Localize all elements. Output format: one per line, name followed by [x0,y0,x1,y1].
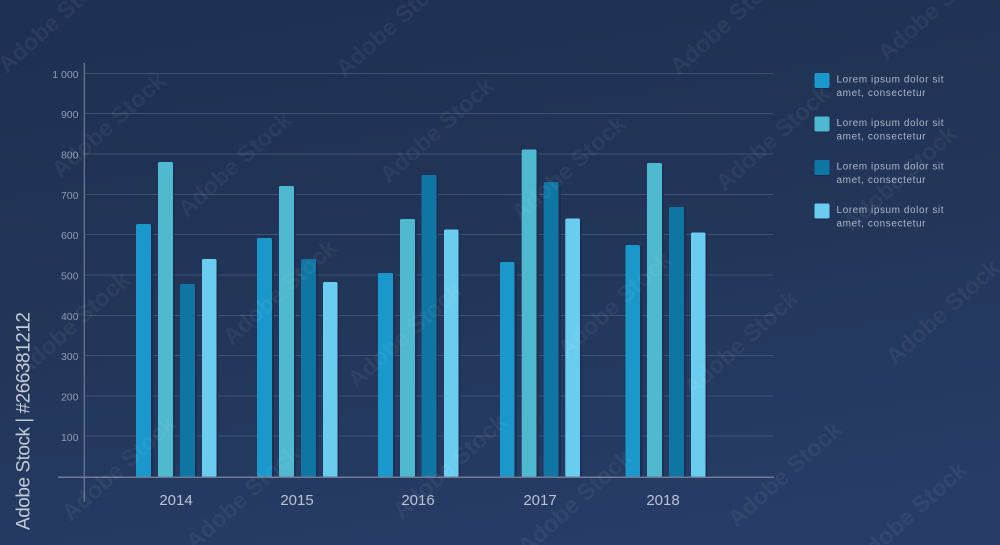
y-axis labels [52,69,79,444]
y-axis labels: 700 [61,190,79,202]
chart [52,63,774,509]
x-axis year labels: 2015 [280,492,314,509]
watermarks: Adobe Stock [218,234,342,350]
x-axis year labels: 2017 [523,492,557,509]
watermarks: Adobe Stock [679,285,803,401]
y-axis labels: 200 [61,392,79,404]
legend item 2 [814,116,944,142]
legend item 3 [814,160,944,186]
legend item 4: amet, consectetur [836,218,926,230]
y-axis labels: 600 [61,230,79,242]
watermarks: Adobe Stock [11,266,135,382]
bars: 2015 [257,186,340,477]
watermarks: Adobe Stock [57,410,181,526]
watermarks: Adobe Stock [47,67,171,183]
y-axis labels: 900 [61,109,79,121]
legend item 4: Lorem ipsum dolor sit [836,205,944,216]
legend item 1 [814,73,944,99]
legend item 3: Lorem ipsum dolor sit [836,162,944,172]
watermarks: Adobe Stock [388,408,512,524]
legend item 1: Lorem ipsum dolor sit [836,74,944,86]
watermarks: Adobe Stock [711,80,835,196]
watermarks: Adobe Stock [173,106,297,222]
axes [58,63,774,502]
legend item 1: amet, consectetur [836,88,926,99]
bars: 2016 [378,175,460,477]
y-axis labels: 800 [61,150,79,162]
watermarks: Adobe Stock [343,277,467,393]
y-axis labels: 400 [61,311,79,323]
x-axis year labels [159,492,680,509]
x-axis year labels: 2016 [401,492,435,509]
legend item 3: amet, consectetur [836,175,926,186]
gridlines [84,74,773,436]
x-axis year labels: 2014 [159,492,193,509]
legend item 4 [814,204,944,230]
bars: 2017 [500,150,582,477]
legend item 2: amet, consectetur [836,132,926,142]
y-axis labels: 300 [61,351,79,363]
watermarks: Adobe Stock [838,120,962,236]
bars: 2018 [626,163,708,477]
y-axis labels: 500 [61,270,79,282]
x-axis year labels: 2018 [646,492,680,509]
stock id side text: Adobe Stock | #266381212 [14,312,34,530]
legend item 2: Lorem ipsum dolor sit [836,118,944,129]
watermarks: Adobe Stock [507,110,631,226]
watermarks: Adobe Stock [553,246,677,362]
y-axis labels: 100 [61,432,79,444]
bars: 2014 [136,162,218,477]
watermarks: Adobe Stock [723,416,847,532]
legend [814,73,944,230]
watermarks: Adobe Stock [375,72,499,188]
y-axis labels: 1 000 [52,69,79,81]
